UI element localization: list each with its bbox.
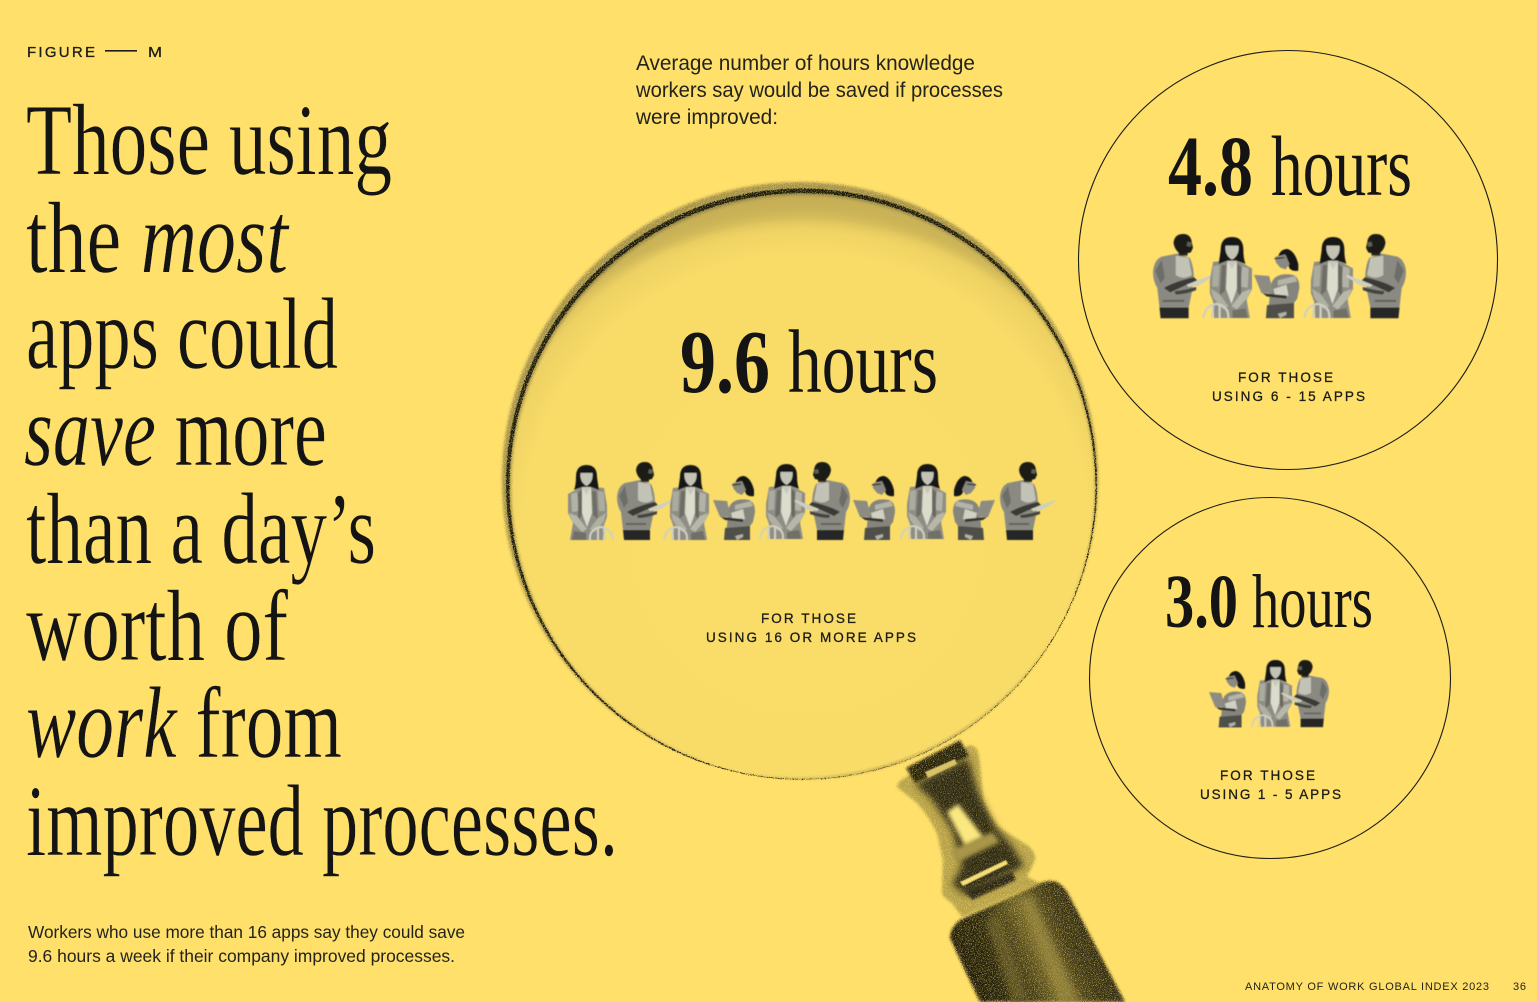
label: 6 to 15 apps xyxy=(1212,370,1365,404)
people row: 10 workers xyxy=(568,462,1056,540)
intro text: were improved: xyxy=(635,106,778,129)
stat: 3.0 hours: hours xyxy=(1252,560,1373,644)
title: the most xyxy=(26,182,290,295)
title: worth of xyxy=(26,570,288,683)
people row: 5 workers xyxy=(1153,234,1406,318)
stat: 9.6 hours: hours xyxy=(788,313,938,412)
label: 1 to 5 apps: FOR THOSE xyxy=(1220,768,1315,783)
stat: 4.8 hours: 4.8 xyxy=(1168,118,1253,214)
stat: 4.8 hours: hours xyxy=(1271,118,1412,214)
label: 1 to 5 apps xyxy=(1200,768,1341,802)
figure label: M xyxy=(148,44,162,61)
lens rim xyxy=(502,182,1098,780)
circle: 1 to 5 apps xyxy=(1090,498,1450,858)
page footer: ANATOMY OF WORK GLOBAL INDEX 2023 xyxy=(1245,981,1489,993)
stat: 9.6 hours: 9.6 xyxy=(680,313,770,412)
stat: 9.6 hours xyxy=(680,313,938,412)
page footer: 36 xyxy=(1513,981,1526,993)
label: 6 to 15 apps: USING 6 - 15 APPS xyxy=(1212,389,1365,404)
label: 16 or more apps: FOR THOSE xyxy=(761,611,856,626)
label: 6 to 15 apps: FOR THOSE xyxy=(1238,370,1333,385)
magnifying glass lens xyxy=(502,182,1098,780)
people row: 3 workers xyxy=(1209,660,1329,727)
intro text: Average number of hours knowledge xyxy=(636,52,975,75)
title: save more xyxy=(24,375,327,488)
footnote text: Workers who use more than 16 apps say they could save xyxy=(28,922,465,942)
figure label xyxy=(27,44,162,61)
title: than a day’s xyxy=(26,473,376,586)
intro text xyxy=(635,52,1003,129)
figure label: FIGURE xyxy=(27,44,95,61)
magnifying glass handle xyxy=(897,740,1125,1002)
label: 16 or more apps: USING 16 OR MORE APPS xyxy=(706,630,916,645)
circle: 6 to 15 apps xyxy=(1078,50,1498,470)
title: Those using xyxy=(26,84,392,197)
stat: 3.0 hours: 3.0 xyxy=(1165,560,1238,644)
title xyxy=(24,84,618,878)
footnote text: 9.6 hours a week if their company improved processes. xyxy=(28,946,455,966)
handle grip xyxy=(950,881,1125,1002)
title: apps could xyxy=(26,278,338,391)
intro text: workers say would be saved if processes xyxy=(635,79,1003,102)
footnote text xyxy=(28,922,465,966)
label: 1 to 5 apps: USING 1 - 5 APPS xyxy=(1200,787,1341,802)
label: 16 or more apps xyxy=(706,611,916,645)
title: work from xyxy=(26,667,342,780)
stat: 4.8 hours xyxy=(1168,118,1412,214)
title: improved processes. xyxy=(26,765,618,878)
stat: 3.0 hours xyxy=(1165,560,1373,644)
